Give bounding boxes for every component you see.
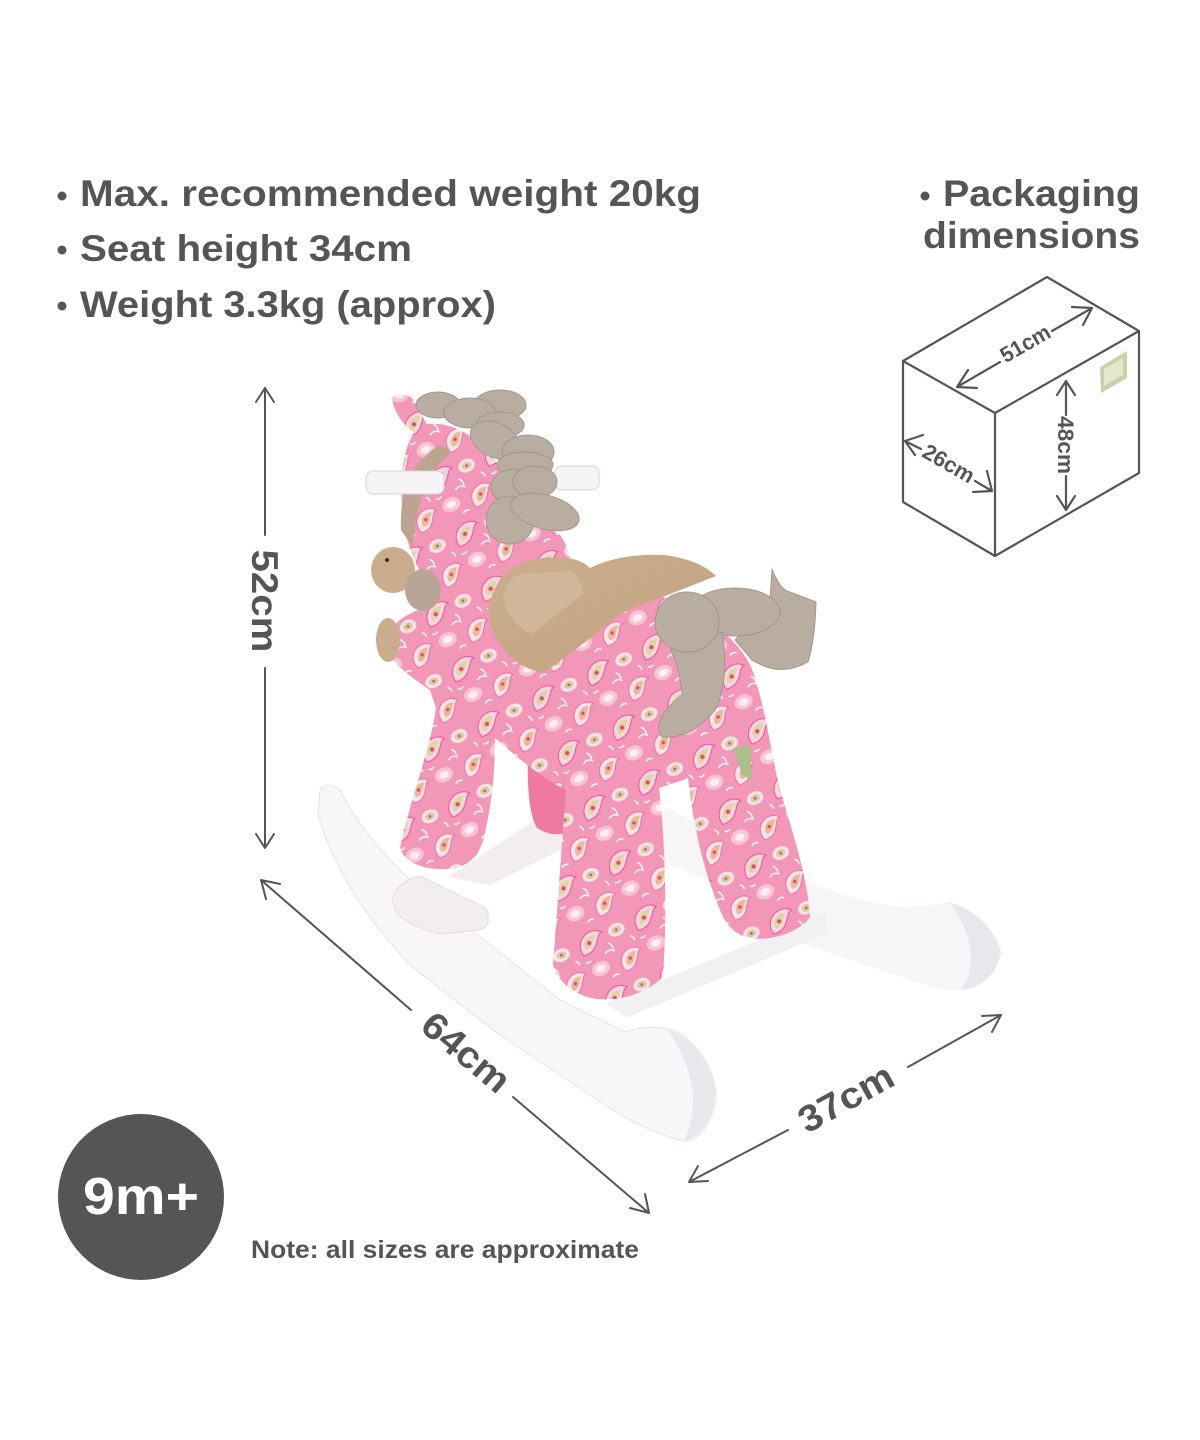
ear: [392, 394, 430, 436]
handle right: [555, 466, 599, 490]
dimension: length 64cm: [261, 880, 649, 1213]
packaging heading: dimensions: [923, 215, 1140, 256]
toy rabbit: [371, 547, 441, 662]
far front leg: [528, 750, 575, 834]
dimension: height 52cm: [244, 388, 285, 848]
stamp label: [1100, 351, 1127, 393]
dimension: width 37cm: 37cm: [791, 1055, 901, 1141]
mane: [416, 390, 583, 544]
near rocker end shading: [668, 1030, 715, 1141]
age badge: 9m+: [83, 1168, 199, 1226]
dimension: length 64cm: 64cm: [413, 1004, 519, 1101]
near rocker: [318, 785, 716, 1141]
arrow: 51cm: 51cm: [996, 319, 1055, 368]
tag: [733, 745, 752, 780]
packaging heading: [920, 173, 1140, 256]
arrow: 48cm: 48cm: [1053, 416, 1078, 474]
foot block: [392, 876, 488, 934]
bullet: max weight: Max. recommended weight 20kg: [80, 173, 701, 214]
bullet: seat height: Seat height 34cm: [80, 228, 412, 269]
front cross slat: [606, 913, 828, 1018]
back cross slat: [448, 820, 568, 885]
arrow: 26cm: 26cm: [918, 439, 979, 488]
far rocker: [660, 808, 1001, 990]
far rocker end highlight: [949, 902, 1001, 990]
arrow: 48cm: [1053, 381, 1078, 510]
dimension: width 37cm: [689, 1015, 1001, 1182]
arrow: 51cm: [957, 307, 1092, 388]
packaging heading: Packaging: [943, 173, 1140, 214]
age badge: [58, 1114, 224, 1280]
saddle: [488, 555, 716, 672]
packaging box diagram: [903, 277, 1139, 556]
tail: [655, 569, 816, 737]
handle left: [366, 471, 444, 494]
note text: Note: all sizes are approximate: [251, 1236, 639, 1264]
bullet: product weight: Weight 3.3kg (approx): [80, 284, 496, 325]
feature list: [58, 173, 701, 325]
head bridle strap: [401, 445, 452, 548]
arrow: 26cm: [905, 435, 992, 492]
dimension: height 52cm: 52cm: [244, 550, 285, 652]
horse body and legs: [382, 424, 810, 999]
saddle seat recess: [503, 571, 583, 634]
box outline: [903, 277, 1139, 556]
rocking horse illustration: [318, 390, 1001, 1141]
